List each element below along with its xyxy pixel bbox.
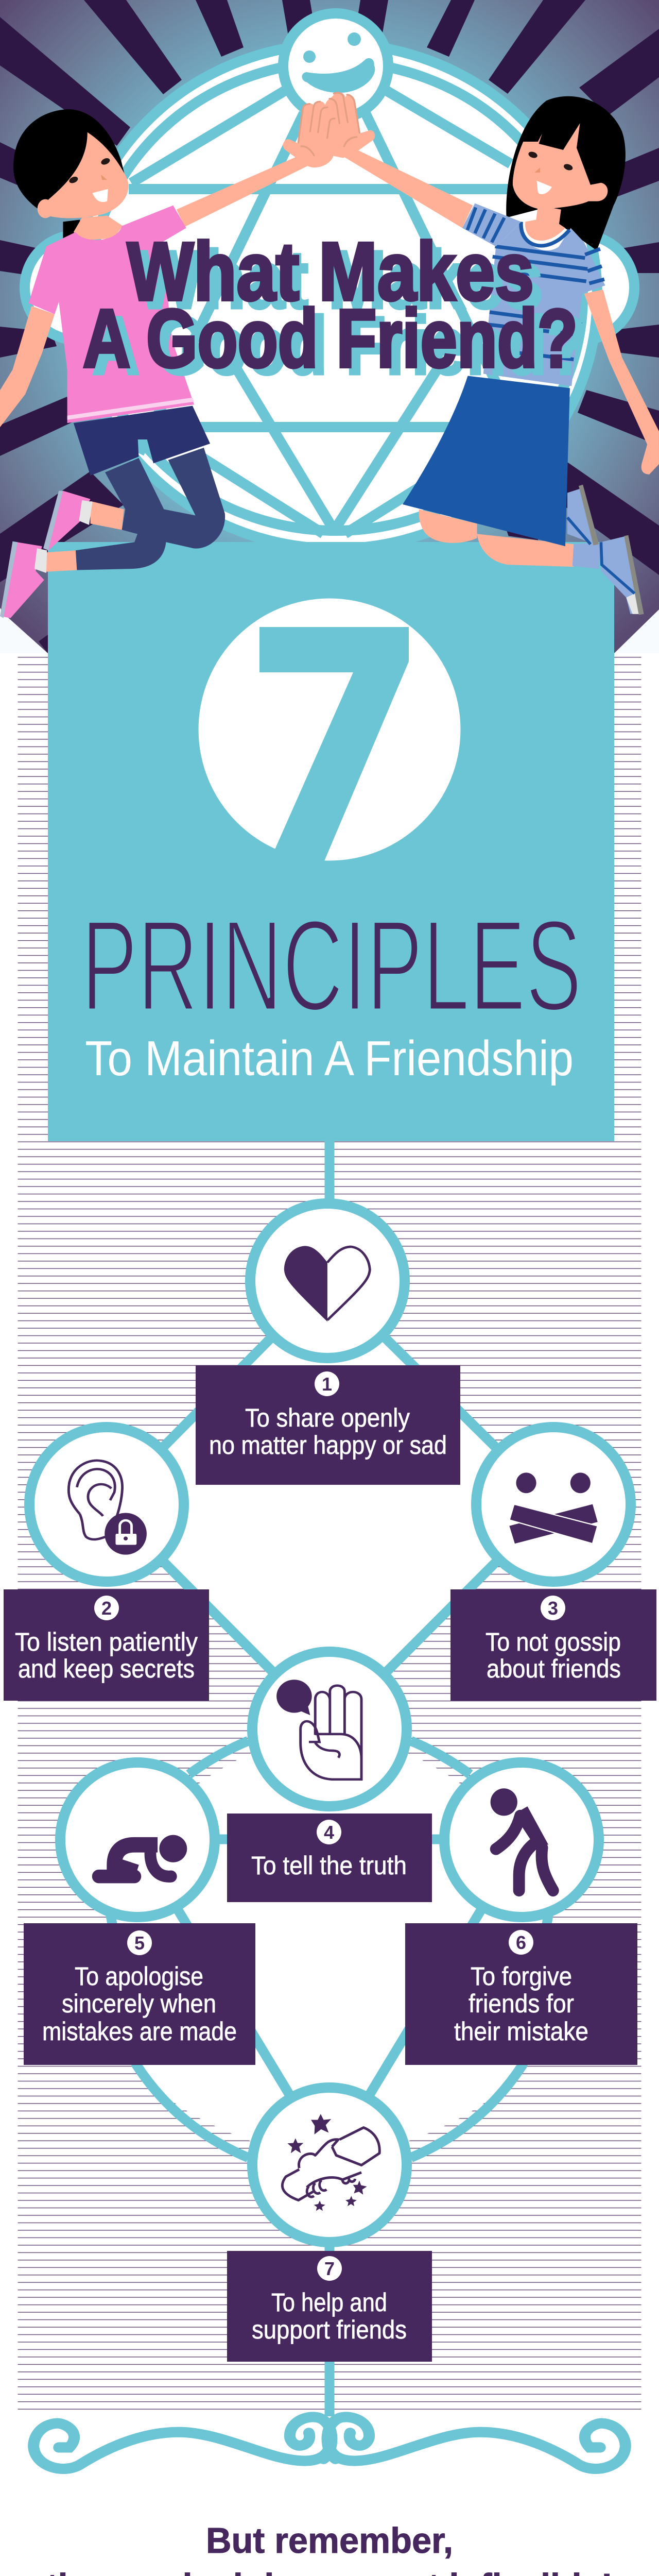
label: principle 1: To share openly (245, 1403, 410, 1432)
label: principle 2: and keep secrets (18, 1654, 195, 1683)
label: principle 2: To listen patiently (15, 1628, 198, 1656)
label: principle 7: support friends (252, 2315, 407, 2344)
principle 6: forgive friends (405, 1762, 637, 2065)
label: principle 6: 6 (516, 1932, 526, 1953)
label: principle 4: 4 (324, 1822, 334, 1843)
panel: header sunburst background (0, 0, 659, 653)
principle 4: tell the truth (227, 1652, 432, 1902)
label: principle 5: To apologise (75, 1962, 203, 1991)
label: principle 1 (196, 1365, 460, 1485)
label: principle 7: To help and (271, 2288, 387, 2317)
label: principle 6 (405, 1923, 637, 2065)
title shadow: What Makes (136, 233, 543, 326)
label: principle 2 (4, 1589, 209, 1701)
icon: smiling face at the top (283, 13, 388, 118)
principle 1: share openly (196, 1204, 460, 1485)
label: principle 5: mistakes are made (42, 2017, 237, 2046)
network: connectors between principles (107, 1141, 553, 2416)
principle 3: not gossip (450, 1427, 656, 1701)
striped background (18, 634, 641, 2576)
title shadow (92, 233, 587, 392)
label: principle 1: no matter happy or sad (209, 1431, 447, 1460)
icon: two hands high five (283, 92, 375, 167)
label: principle 3: about friends (487, 1654, 621, 1683)
principle 2: listen patiently (4, 1427, 209, 1701)
label: principle 5: 5 (134, 1933, 145, 1954)
icon: stooping figure walking (444, 1762, 599, 1917)
label: principle 5: sincerely when (62, 1989, 216, 2018)
label: principle 5 (24, 1923, 255, 2065)
principle 7: help and support (227, 2088, 432, 2362)
icon: person bowing (60, 1762, 215, 1917)
label: principle 3: To not gossip (485, 1628, 621, 1656)
label: principle 3 (450, 1589, 656, 1701)
icon: big number 7 (199, 599, 460, 871)
label: principle 1: 1 (322, 1374, 332, 1395)
principle 5: apologise sincerely (24, 1762, 255, 2065)
icon: taped mouth face (476, 1427, 631, 1582)
label: principle 4: To tell the truth (251, 1851, 407, 1880)
ornament: upper scroll divider (33, 2417, 626, 2469)
label: principle 4 (227, 1814, 432, 1902)
icon: raised hand with speech bubble (252, 1652, 407, 1806)
label: principle 2: 2 (101, 1598, 112, 1619)
label: principle 6: their mistake (454, 2017, 588, 2046)
subheading: to maintain a friendship: To Maintain A Friendship (85, 1031, 574, 1086)
label: principle 7: 7 (324, 2258, 335, 2279)
panel: 7 principles cover (48, 542, 614, 1141)
label: principle 6: friends for (469, 1989, 574, 2018)
illustration: right girl in striped shirt (342, 96, 659, 615)
text block: closing message: But remember, (206, 2520, 453, 2561)
label: principle 7 (227, 2251, 432, 2362)
icon: ear with padlock (29, 1427, 184, 1582)
title: What Makes (127, 225, 534, 317)
text block: closing message (36, 2520, 623, 2576)
title (83, 225, 578, 384)
diagram: friendship network behind the girls (25, 44, 634, 549)
icon: helping handshake with stars (252, 2088, 407, 2242)
label: principle 3: 3 (548, 1598, 558, 1619)
label: principle 6: To forgive (471, 1962, 572, 1991)
icon: half-filled heart (250, 1204, 405, 1358)
illustration: left girl in pink shirt (0, 109, 311, 618)
